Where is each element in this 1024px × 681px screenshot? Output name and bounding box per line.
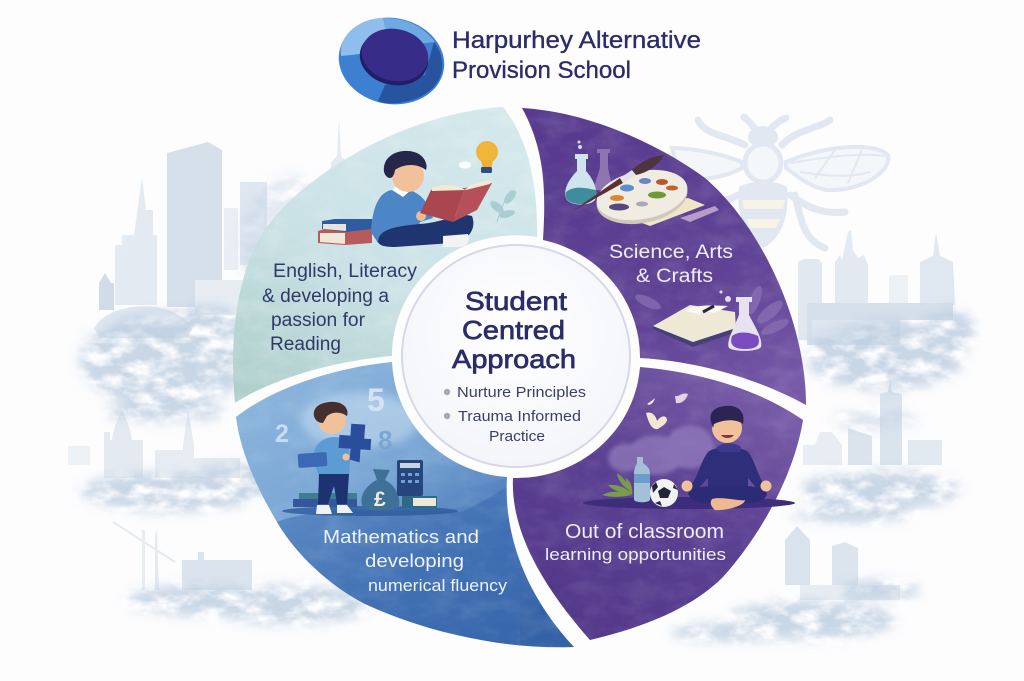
label: Out of classroom	[545, 521, 726, 564]
panel: centre circle	[402, 245, 630, 467]
bee wings	[672, 147, 888, 190]
icon: open book	[653, 305, 737, 347]
bee head	[748, 126, 778, 148]
ground shadow	[583, 497, 795, 509]
school name: Harpurhey Alternative	[452, 27, 701, 54]
centre heading: Approach	[452, 344, 576, 374]
label: Out of classroom: Out of classroom	[565, 521, 724, 543]
label: Science: & Crafts	[636, 266, 713, 287]
centre heading: Student	[465, 286, 568, 316]
numbers: 8	[378, 425, 392, 455]
icon: lightbulb	[459, 141, 498, 173]
icon: stacked books	[318, 219, 372, 245]
centre heading	[452, 286, 576, 374]
school name	[452, 27, 701, 84]
logo outer ring	[332, 9, 451, 113]
bee wing veins	[790, 150, 885, 183]
centre bullets	[444, 384, 586, 445]
centre bullets: Practice	[489, 428, 545, 445]
icon: money bag: £	[374, 488, 386, 511]
icon: purple flask with liquid	[720, 290, 761, 351]
bee legs and antennae	[695, 117, 845, 248]
logo ring light segment	[341, 18, 388, 56]
centre heading: Centred	[462, 315, 565, 345]
icon: purple flask	[593, 149, 613, 190]
label: English: Reading	[270, 334, 341, 355]
segment: Out of classroom	[505, 360, 810, 645]
background: left skyline	[68, 142, 267, 590]
icon: boy with plus sign	[298, 402, 372, 514]
label: Mathematics: Mathematics and	[323, 527, 479, 547]
numbers: 2	[275, 420, 289, 448]
logo	[332, 9, 451, 113]
logo central disc	[355, 24, 433, 92]
segment: Mathematics	[230, 360, 580, 660]
label: Mathematics: numerical fluency	[368, 577, 508, 595]
label: Science	[609, 242, 733, 287]
ground shadow	[282, 506, 458, 516]
mist cloud	[608, 425, 714, 475]
numbers	[275, 382, 392, 455]
numbers: 5	[367, 382, 385, 418]
icon: paintbrush	[571, 155, 664, 212]
label: Out of classroom: learning opportunities	[545, 545, 726, 564]
icon: calculator	[397, 460, 423, 496]
background: top spire	[331, 116, 347, 240]
label: English: & developing a	[262, 286, 389, 307]
icon: butterflies	[646, 394, 688, 429]
icon: teal flask	[565, 140, 596, 204]
bee abdomen	[738, 182, 788, 248]
icon: boy reading	[371, 151, 492, 247]
icon: stack of books	[293, 493, 357, 507]
icon: faint leaves	[633, 284, 791, 338]
segment: English and Literacy	[225, 100, 545, 410]
icon: boy meditating	[682, 406, 772, 510]
icon: book	[402, 496, 437, 508]
bee stripes	[742, 200, 785, 228]
icon: money bag	[361, 469, 399, 511]
label: English: passion for	[271, 310, 366, 331]
label: English: English, Literacy	[273, 261, 418, 282]
label: Mathematics	[323, 527, 508, 595]
icon: leaf sprig	[488, 188, 518, 222]
bee thorax	[745, 144, 781, 182]
icon: paper sheets	[615, 198, 719, 226]
centre bullets: Trauma Informed	[458, 408, 581, 425]
centre bullets: Nurture Principles	[457, 384, 586, 401]
label: English	[262, 261, 418, 355]
background: left clouds	[80, 175, 370, 625]
label: Mathematics: developing	[365, 551, 464, 571]
icon: palette	[592, 163, 692, 231]
segment: Science, Arts and Crafts	[515, 100, 815, 410]
icon: football	[650, 479, 678, 507]
icon: plant	[602, 473, 632, 497]
logo ring dark segment	[378, 42, 442, 103]
icon: water bottle	[634, 457, 650, 502]
school name: Provision School	[452, 57, 631, 84]
logo ring mid segment	[383, 18, 435, 44]
label: Science: Science, Arts	[609, 242, 733, 263]
darker lower ground	[277, 487, 520, 646]
background: Manchester bee	[672, 117, 888, 248]
background: right skyline	[785, 230, 955, 600]
background: right clouds	[670, 308, 975, 642]
